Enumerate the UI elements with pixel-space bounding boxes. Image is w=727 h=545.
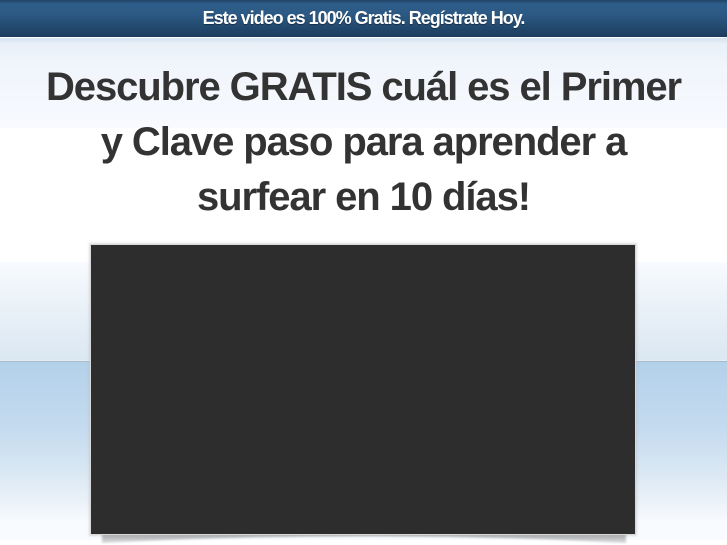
video player panel: [91, 245, 635, 534]
video shadow: [100, 535, 628, 544]
top banner: Este video es 100% Gratis. Regístrate Hoy.: [203, 8, 524, 28]
headline: Descubre GRATIS cuál es el Primer: [46, 65, 681, 109]
headline: surfear en 10 días!: [197, 175, 530, 219]
headline: y Clave paso para aprender a: [101, 120, 626, 164]
top banner: [0, 0, 727, 37]
headline: [46, 65, 682, 219]
